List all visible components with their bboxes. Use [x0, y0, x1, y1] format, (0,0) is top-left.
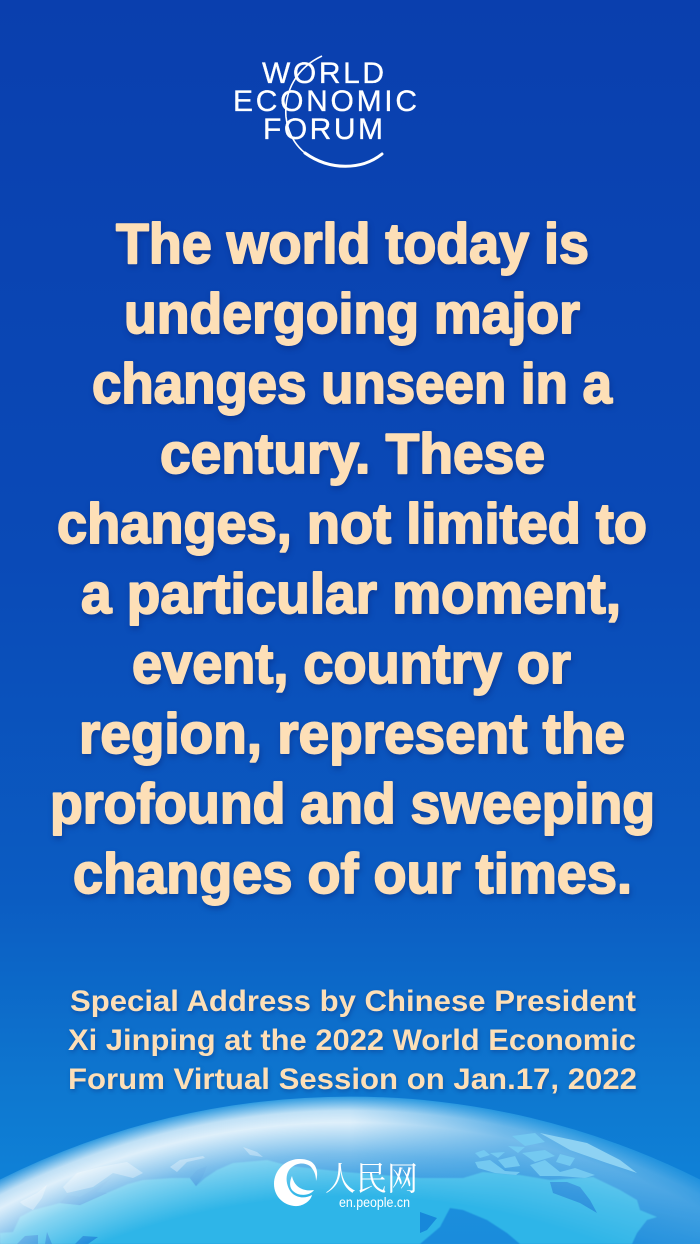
- main quote: [50, 212, 655, 906]
- main quote: century. These: [160, 422, 545, 486]
- northern Europe highlights: [20, 1147, 263, 1210]
- Greenland: [540, 1133, 637, 1173]
- main quote: changes unseen in a: [92, 352, 613, 416]
- main quote: undergoing major: [124, 282, 580, 346]
- icon: crescent globe: [274, 1159, 317, 1206]
- main quote: changes of our times.: [73, 842, 632, 906]
- main quote: profound and sweeping: [50, 772, 655, 836]
- ocean patches and inland seas: [17, 1166, 597, 1244]
- source attribution: Forum Virtual Session on Jan.17, 2022: [68, 1063, 637, 1096]
- glowing rim: [0, 1097, 700, 1244]
- land masses: [0, 1160, 657, 1244]
- source attribution: [68, 985, 637, 1096]
- main quote: The world today is: [116, 212, 589, 276]
- main quote: event, country or: [132, 632, 571, 696]
- logo: People's Daily Online: [274, 1153, 418, 1210]
- logo: World Economic Forum: [233, 56, 417, 166]
- logo: World Economic Forum: ECONOMIC: [233, 85, 417, 118]
- main quote: a particular moment,: [81, 562, 621, 626]
- source attribution: Xi Jinping at the 2022 World Economic: [68, 1024, 636, 1057]
- website: en.people.cn: [339, 1194, 410, 1210]
- logo: World Economic Forum: WORLD: [262, 57, 384, 90]
- main quote: region, represent the: [79, 702, 625, 766]
- main quote: changes, not limited to: [57, 492, 647, 556]
- wordmark: 人民网: [325, 1153, 418, 1200]
- source attribution: Special Address by Chinese President: [70, 985, 636, 1018]
- logo: World Economic Forum: FORUM: [263, 113, 383, 146]
- globe: [0, 1097, 700, 1244]
- arctic islands: [475, 1133, 595, 1178]
